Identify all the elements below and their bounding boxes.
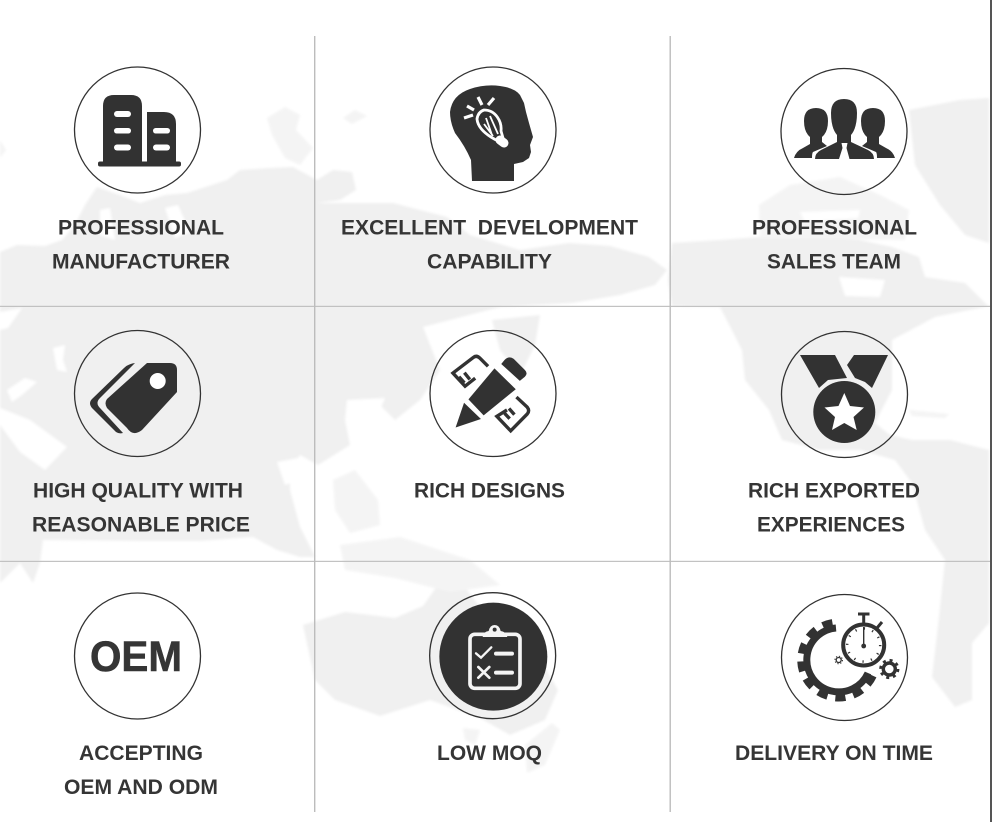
icon: three business people [781,68,907,194]
label: high quality with reasonable price: HIGH QUALITY WITH [33,480,243,502]
label: rich exported experiences [748,480,920,536]
label: professional manufacturer: PROFESSIONAL [58,216,224,240]
icon: OEM badge [74,593,200,719]
label: excellent development capability: CAPABILITY [427,250,552,274]
label: professional manufacturer [52,216,230,274]
label: delivery on time: DELIVERY ON TIME [735,742,933,765]
icon: gears and stopwatch [782,594,908,720]
label: professional sales team [752,216,917,274]
label: accepting oem and odm: ACCEPTING [79,742,203,765]
icon: clipboard checklist [430,593,556,719]
label: rich exported experiences: RICH EXPORTED [748,480,920,502]
cell: professional manufacturer [52,67,230,274]
cell: delivery on time [735,594,933,765]
label: high quality with reasonable price [32,480,250,536]
label: accepting oem and odm: OEM AND ODM [64,776,218,799]
label: excellent development capability: EXCELLENT DEVELOPMENT [341,216,638,240]
icon: factory buildings [74,67,200,193]
label: professional sales team: PROFESSIONAL [752,216,917,240]
label: rich designs: RICH DESIGNS [414,480,565,502]
cell: rich exported experiences [748,332,920,536]
cell: excellent development capability [341,67,638,274]
icon: medal with star [782,332,908,458]
label: excellent development capability [341,216,638,274]
cell: rich designs [414,330,565,502]
label: professional manufacturer: MANUFACTURER [52,250,230,274]
icon: head with light bulb [430,67,556,193]
icon: pencil and ruler [430,330,556,456]
label: rich exported experiences: EXPERIENCES [757,514,905,536]
icon: price tag [74,330,200,456]
cell: low moq [430,593,556,765]
cell: accepting oem and odm [64,593,218,799]
cell: high quality with reasonable price [32,330,250,536]
label: professional sales team: SALES TEAM [767,250,901,274]
label: accepting oem and odm [64,742,218,799]
label: high quality with reasonable price: REASONABLE PRICE [32,514,250,536]
label: low moq: LOW MOQ [437,742,542,765]
right border [990,0,992,822]
icon: OEM badge: OEM [90,633,182,681]
cell: professional sales team [752,68,917,274]
